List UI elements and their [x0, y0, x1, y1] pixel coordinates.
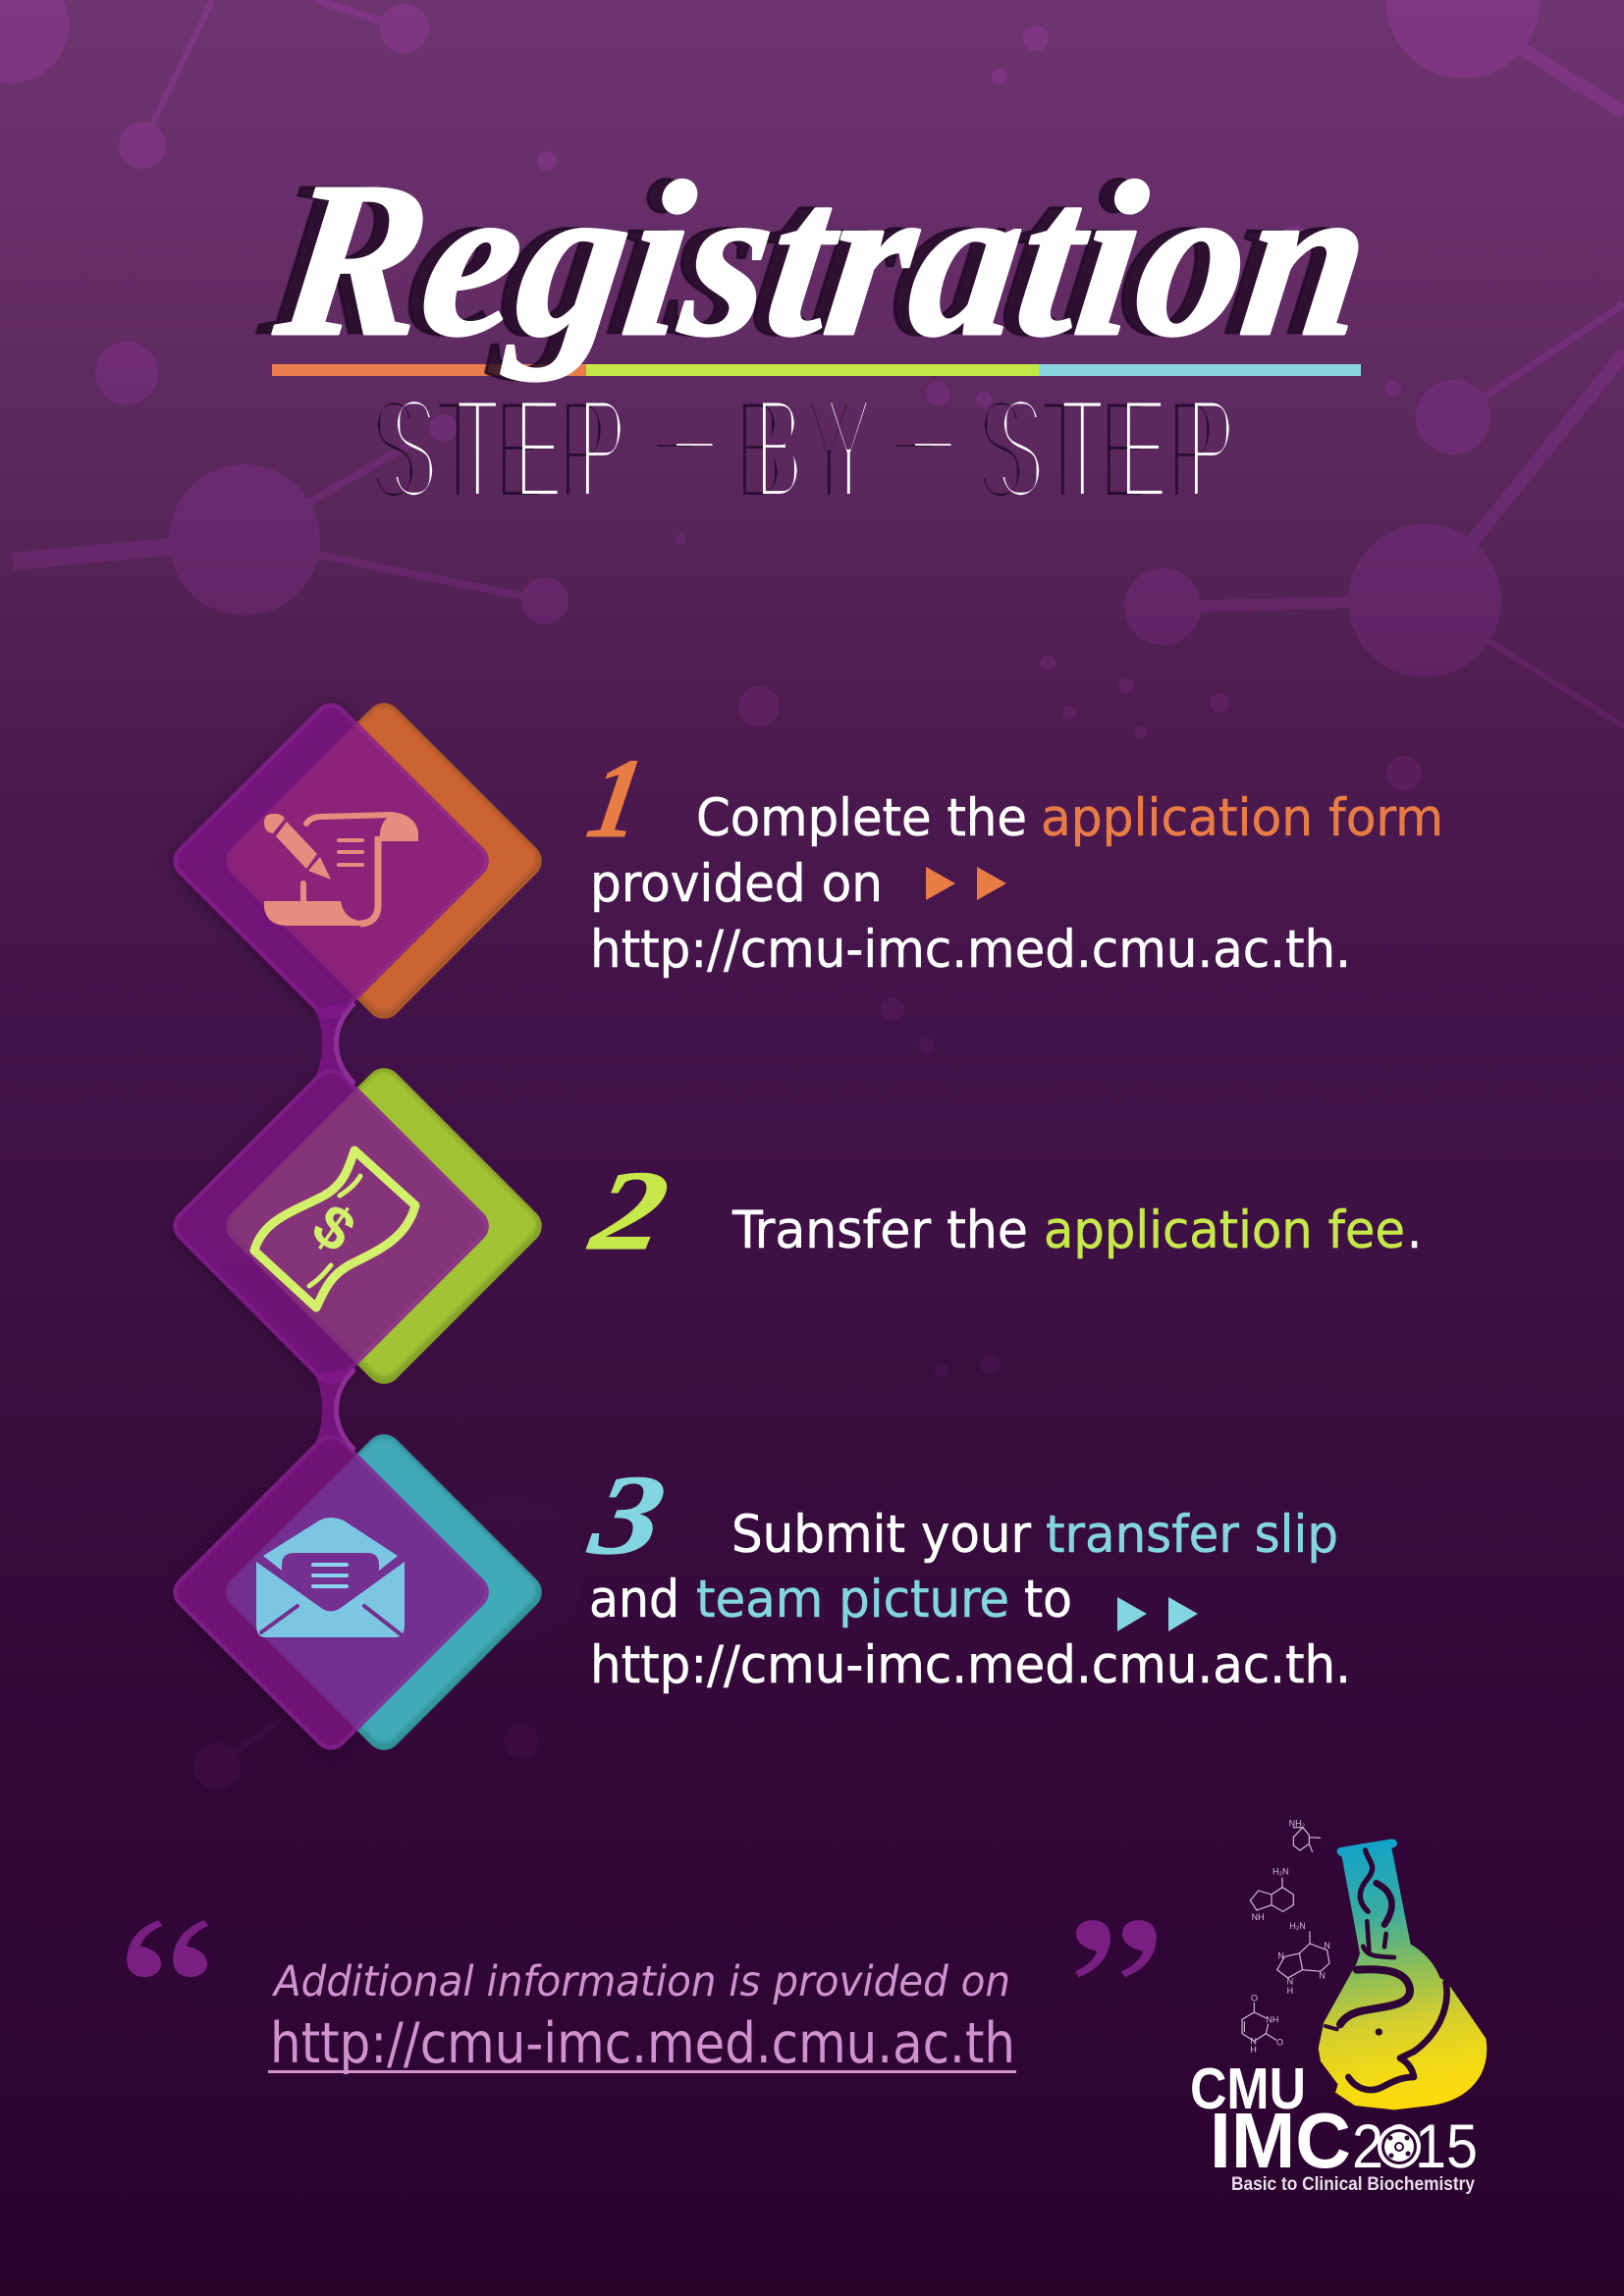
numeral 3: 3	[581, 1453, 674, 1578]
title shadow: Registration	[249, 136, 1368, 382]
closing quote mark: ”	[1060, 1875, 1257, 2114]
text block: step 3: team picture	[696, 1570, 1009, 1629]
molecule: cytosine: NH₂	[1289, 1819, 1306, 1829]
colored underline bar	[272, 364, 1361, 376]
molecule: cytosine	[1289, 1819, 1321, 1852]
text block: step 3: Submit your	[731, 1505, 1031, 1565]
logo: CMU IMC 2015	[1190, 1819, 1487, 2195]
logo tagline: Basic to Clinical Biochemistry	[1231, 2174, 1475, 2195]
panel: step 2 diamond	[166, 1001, 549, 1393]
molecule: adenine small: NH	[1252, 1912, 1265, 1922]
logo wordmark: CMU: CMU	[1190, 2056, 1306, 2121]
molecule: uracil	[1242, 1993, 1283, 2055]
molecule: adenine large: H₂N	[1289, 1921, 1306, 1931]
molecule: adenine small	[1250, 1866, 1293, 1922]
text block: step 3: transfer slip	[1046, 1505, 1338, 1565]
text block: step 3: http://cmu-imc.med.cmu.ac.th.	[590, 1635, 1351, 1695]
diamond shadow	[166, 698, 496, 1028]
text block: step 1: application form	[1041, 788, 1443, 848]
icon: open envelope	[256, 1518, 405, 1637]
diamond shadow	[166, 1063, 496, 1393]
flask emblem	[1319, 1839, 1487, 2109]
text block: step 1	[579, 736, 1443, 980]
text block: step 3: to	[1024, 1570, 1072, 1629]
molecule: adenine large: H	[1287, 1986, 1293, 1996]
molecule: adenine large: N	[1319, 1971, 1326, 1981]
icon: scroll and pencil	[264, 814, 415, 926]
diamond shadow	[166, 1429, 496, 1759]
numeral 2: 2	[581, 1148, 677, 1274]
connector highlight	[336, 1003, 354, 1084]
arrows	[926, 867, 1006, 900]
molecule: uracil: NH	[1266, 2015, 1278, 2025]
subtitle: STEP - BY - STEP	[370, 353, 1235, 530]
molecule: uracil: H	[1250, 2045, 1257, 2055]
opening quote mark: “	[27, 1875, 223, 2114]
molecule: adenine large: N	[1287, 1977, 1293, 1987]
purple front diamond with connector	[166, 1001, 496, 1391]
text block: step 3	[581, 1453, 1351, 1695]
title text: Registration	[265, 137, 1383, 383]
molecule: adenine large: N	[1277, 1951, 1284, 1961]
molecule: uracil: O	[1251, 1993, 1258, 2002]
panel: step 3 diamond	[166, 1367, 549, 1759]
text block: step 2: application fee	[1044, 1201, 1405, 1260]
text block: step 1: Complete the	[696, 788, 1027, 848]
icon: cell in zero	[1378, 2125, 1421, 2168]
panel: step 1 diamond	[166, 696, 549, 1028]
arrows	[1117, 1597, 1198, 1631]
orange back diamond	[219, 696, 549, 1026]
teal back diamond	[219, 1427, 549, 1757]
text block: step 2: Transfer the	[731, 1201, 1028, 1260]
dollar sign: $	[300, 1191, 367, 1266]
molecule: uracil: N	[1250, 2037, 1257, 2047]
green back diamond	[219, 1061, 549, 1391]
purple front diamond	[166, 696, 496, 1026]
additional information line: Additional information is provided on	[271, 1957, 1010, 2006]
molecule: adenine small: H₂N	[1272, 1866, 1288, 1876]
icon: banknote	[254, 1150, 415, 1308]
text block: step 3: and	[589, 1570, 679, 1629]
logo wordmark: IMC: IMC	[1210, 2097, 1351, 2184]
subtitle shadow: STEP–BY–STEP	[370, 354, 1216, 530]
molecule: adenine large: N	[1324, 1941, 1330, 1950]
title: Registration	[249, 136, 1383, 383]
numeral 1: 1	[579, 736, 653, 862]
url: http://cmu-imc.med.cmu.ac.th	[270, 2011, 1015, 2076]
text block: step 2	[581, 1148, 1422, 1274]
quote block: additional information	[27, 1875, 1257, 2114]
connector highlight	[336, 1369, 354, 1450]
background molecule network	[0, 0, 1624, 1377]
purple front diamond with connector	[166, 1367, 496, 1757]
molecule: adenine large	[1277, 1921, 1330, 1996]
molecule: uracil: O	[1276, 2037, 1283, 2047]
subtitle text: STEP–BY–STEP	[390, 353, 1235, 529]
logo year: 2015	[1352, 2112, 1478, 2181]
text block: step 2: .	[1407, 1201, 1422, 1260]
text block: step 1: http://cmu-imc.med.cmu.ac.th.	[590, 920, 1351, 980]
text block: step 1: provided on	[590, 854, 883, 914]
